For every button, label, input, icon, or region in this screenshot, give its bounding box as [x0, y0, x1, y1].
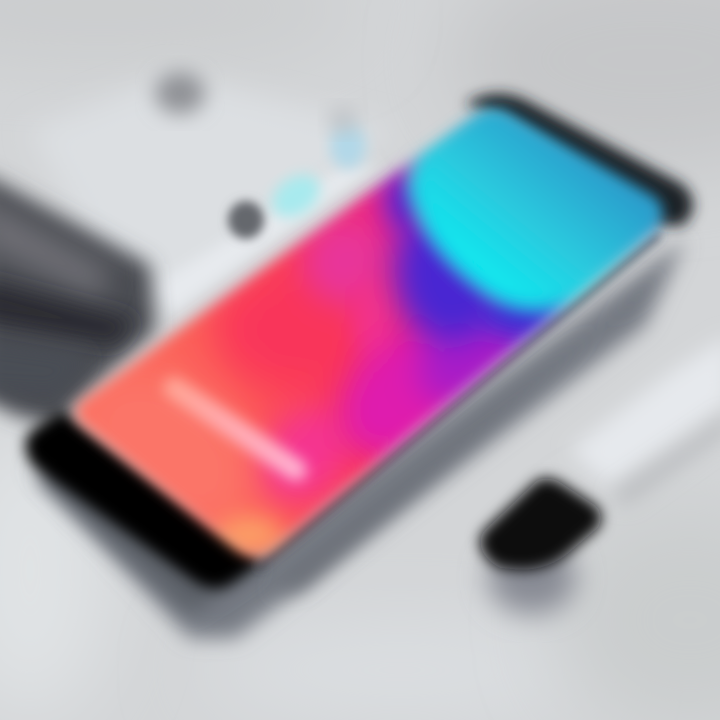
screen pink area: [303, 220, 387, 304]
screen label bar: [174, 388, 296, 470]
screen: [66, 99, 673, 567]
screen orange corner: [216, 517, 284, 553]
screen lower pink: [250, 396, 358, 514]
device shadow: [488, 542, 576, 614]
phone dark bottom bezel: [25, 410, 262, 588]
small black device: [480, 478, 601, 614]
cable on right: [570, 335, 720, 505]
screen coral corner: [112, 382, 258, 518]
phone lower edge: [258, 234, 660, 568]
dark box on left: [0, 172, 155, 425]
icon: pale blue accent: [330, 123, 366, 169]
screen purple: [395, 198, 505, 342]
icon: blurred dark camera circle: [228, 201, 264, 239]
phone side body: [28, 240, 685, 638]
screen red area: [200, 274, 313, 392]
device body: [480, 478, 601, 570]
smartphone: [14, 83, 704, 651]
icon: cyan accent: [264, 166, 328, 226]
white box behind phone: [30, 72, 395, 320]
screen cyan shape: [410, 95, 690, 309]
icon: grey smudge above accent: [329, 108, 357, 132]
screen magenta: [322, 328, 446, 470]
phone dark top bezel: [465, 94, 693, 226]
icon: box logo: [155, 72, 205, 114]
